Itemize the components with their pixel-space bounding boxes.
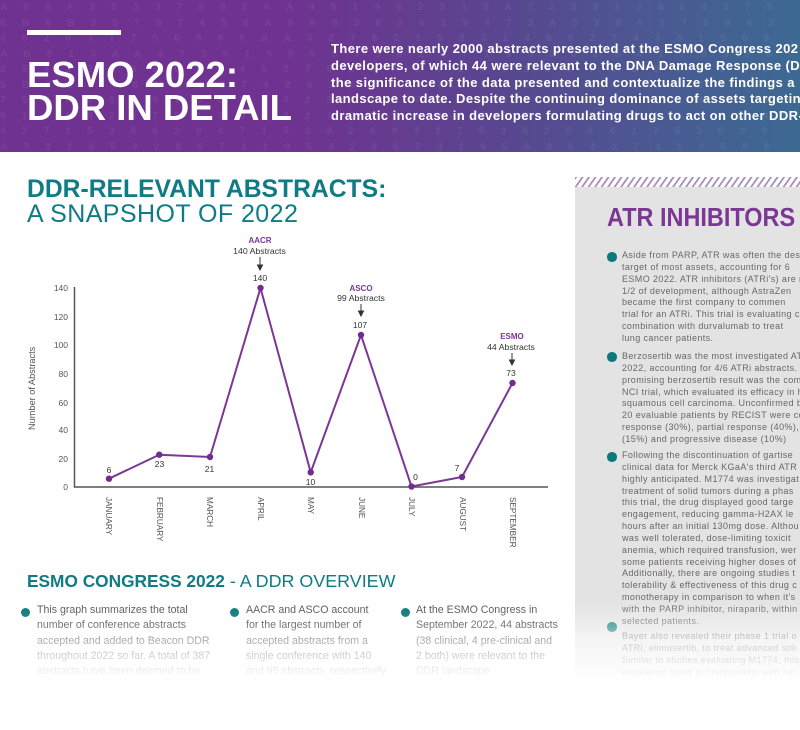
- y axis tick labels: 120: [54, 312, 68, 322]
- text: [37, 604, 210, 677]
- month labels: JANUARY: [104, 497, 113, 536]
- data value labels: [107, 273, 516, 487]
- paragraph 4: Bayer also revealed their phase 1 trial o: [622, 631, 797, 641]
- header banner: 2 5 4 1 2 5 8 3 6 9 8 4 5 2 7 6 1 3 A 5 9 2 8 4 1 6 3 7 5 2 9 8 4 6 1 3: [0, 63, 775, 75]
- paragraph 1: became the first company to commen: [622, 297, 786, 307]
- month labels: FEBRUARY: [155, 497, 164, 542]
- paragraph 1: combination with durvalumab to treat: [622, 321, 783, 331]
- data value labels: 7: [455, 463, 460, 473]
- section heading: DDR-relevant abstracts: A SNAPSHOT OF 2022: [27, 200, 298, 228]
- paragraph 3: selected patients.: [622, 616, 699, 626]
- header banner: 4 6 2 8 3 1 7 5 6 9 8 5 A A 3 2 7 8 2 1 5 8 3 1 4 6 9 2 7 4 3 8 1 5 6 9: [0, 32, 776, 44]
- data points: [106, 285, 516, 490]
- paragraph 3: anemia, which required transfusion, wer: [622, 545, 797, 555]
- overview column 2: [230, 604, 386, 677]
- text: number of conference abstracts: [37, 619, 186, 631]
- paragraph 3: some patients receiving higher doses of: [622, 557, 796, 567]
- bullet 2: [607, 352, 616, 362]
- callout: AACR: AACR: [248, 236, 272, 245]
- paragraph 3: highly anticipated. M1774 was investigat: [622, 474, 799, 484]
- text: This graph summarizes the total: [37, 604, 188, 616]
- header intro text: the significance of the data presented and contextualize the findings a: [331, 75, 795, 90]
- overview column 1: [21, 604, 210, 677]
- section heading: DDR-relevant abstracts: DDR-RELEVANT ABSTRACTS:: [27, 176, 386, 203]
- fade: ATR panel: [575, 600, 800, 680]
- title: [27, 54, 292, 128]
- panel heading: ATR INHIBITORS: [607, 204, 795, 232]
- section heading: ESMO Congress overview: ESMO CONGRESS 2022 - A DDR OVERVIEW: [27, 571, 396, 591]
- paragraph 4: Similar to studies evaluating M1774, this: [622, 655, 799, 665]
- header banner: 7 5 2 8 4 6 3 9 1 5 8 2 6 4 2 8 4 A 2 7 1 3 6 5 9 4 8 2 7 3 5 1 9 6 4 8: [0, 94, 775, 106]
- callout: ASCO: 99 Abstracts: [337, 293, 386, 303]
- paragraph 4: ATRi, elimusertib, to treat advanced soli: [622, 643, 797, 653]
- y axis title: Number of Abstracts: [27, 346, 37, 430]
- text: for the largest number of: [246, 619, 361, 631]
- bullet: [20, 608, 30, 616]
- paragraph 1: trial for an ATRi. This trial is evaluating c: [622, 309, 800, 319]
- overview column 3: [401, 604, 558, 677]
- callout: AACR: 140 Abstracts: [233, 246, 286, 256]
- text: throughout 2022 so far. A total of 387: [37, 650, 210, 662]
- y axis tick labels: 0: [63, 482, 68, 492]
- section heading: DDR-relevant abstracts: [27, 176, 386, 228]
- header banner: 5 B 7 2 9 4 6 1 8 3 5 7 4 2 9 1 6 8 3 4 7 1 5 9 2 6 8 3 4 1 7 5 2 9 6 4: [0, 78, 776, 90]
- month labels: SEPTEMBER: [508, 497, 517, 548]
- text: accepted abstracts from a: [246, 635, 368, 647]
- header banner: A B 9 1 3 A A 4 7 3 5 1 5 8 9 8 3 3 6 2 4 7 1 9 5 3 8 2 6 4 1 7 9 3 5 8: [0, 48, 779, 60]
- fade: overview columns: [0, 606, 575, 682]
- axes: [74, 287, 548, 487]
- paragraph 3: engagement, reducing gamma-H2AX le: [622, 509, 794, 519]
- paragraph 3: Additionally, there are ongoing studies t: [622, 568, 795, 578]
- month labels: [104, 497, 517, 548]
- panel: ATR inhibitors: [575, 177, 800, 730]
- paragraph 4: [622, 631, 799, 677]
- paragraph 2: 20 evaluable patients by RECIST were co: [622, 410, 800, 420]
- paragraph 1: lung cancer patients.: [622, 333, 713, 343]
- striped top edge: [575, 177, 800, 187]
- header intro text: developers, of which 44 were relevant to the DNA Damage Response (D: [331, 58, 800, 73]
- text: [246, 604, 386, 677]
- text: accepted and added to Beacon DDR: [37, 635, 210, 647]
- data value labels: 23: [155, 459, 164, 469]
- paragraph 1: Aside from PARP, ATR was often the des: [622, 250, 800, 260]
- paragraph 3: [622, 450, 799, 626]
- y axis tick labels: 40: [59, 425, 68, 435]
- callout: ESMO: 44 Abstracts: [487, 342, 536, 352]
- data value labels: 10: [306, 477, 315, 487]
- text: and 99 abstracts, respectively: [246, 665, 386, 677]
- header banner: [0, 0, 800, 152]
- header intro text: [331, 41, 800, 123]
- bullet 3: [607, 452, 616, 462]
- data line: [109, 288, 512, 486]
- paragraph 1: [622, 250, 800, 343]
- paragraph 1: 1/2 of development, although AstraZen: [622, 286, 791, 296]
- white accent bar: [27, 30, 121, 34]
- callout: AACR: [233, 236, 286, 270]
- data value labels: 73: [506, 368, 516, 378]
- header banner: A 9 8 A 2 5 3 3 7 9 8 2 A A 4 8 1 4 6 2 3 1 8 A 7 2 5 9 1 3 8 6 4 2 7 5: [0, 1, 779, 13]
- callout: ESMO: [487, 332, 536, 365]
- paragraph 3: was well tolerated, dose-limiting toxicit: [622, 533, 791, 543]
- month labels: AUGUST: [458, 497, 467, 531]
- month labels: APRIL: [256, 497, 265, 521]
- header banner: 8 B 9 B 2 5 7 9 7 4 5 8 A 9 A 8 3 8 2 6 1 9 4 7 3 A 5 2 8 6 1 7 3 9 4 2: [0, 16, 780, 28]
- text: At the ESMO Congress in: [416, 604, 537, 616]
- text: September 2022, 44 abstracts: [416, 619, 558, 631]
- y axis tick labels: [54, 283, 68, 492]
- data value labels: 107: [353, 320, 367, 330]
- text: abstracts have been deemed to be: [37, 665, 200, 677]
- callout: ESMO: ESMO: [500, 332, 524, 341]
- text: DDR landscape: [416, 665, 490, 677]
- callout: ASCO: [337, 284, 386, 316]
- text: [416, 604, 558, 677]
- paragraph 2: [622, 351, 800, 444]
- y axis tick labels: 80: [59, 369, 68, 379]
- text: AACR and ASCO account: [246, 604, 368, 616]
- title: DDR IN DETAIL: [27, 86, 292, 128]
- bullet: [230, 608, 238, 616]
- paragraph 1: target of most assets, accounting for 6: [622, 262, 790, 272]
- data value labels: 140: [253, 273, 267, 283]
- data value labels: 6: [107, 465, 112, 475]
- text: (38 clinical, 4 pre-clinical and: [416, 635, 552, 647]
- data value labels: 21: [205, 464, 214, 474]
- title: ESMO 2022:: [27, 54, 238, 95]
- paragraph 4: escalation study in combination with nir: [622, 667, 794, 677]
- bullet 4: [607, 622, 616, 632]
- paragraph 3: monotherapy in comparison to when it's: [622, 592, 796, 602]
- month labels: MARCH: [205, 497, 214, 527]
- month labels: MAY: [306, 497, 315, 515]
- header intro text: landscape to date. Despite the continuing dominance of assets targetin: [331, 91, 800, 106]
- header intro text: dramatic increase in developers formulating drugs to act on other DDR-: [331, 108, 800, 123]
- paragraph 3: treatment of solid tumors during a phas: [622, 486, 794, 496]
- header intro text: There were nearly 2000 abstracts presented at the ESMO Congress 202: [331, 41, 798, 56]
- month labels: JULY: [407, 497, 416, 517]
- bullet: [400, 608, 410, 616]
- paragraph 3: with the PARP inhibitor, niraparib, within: [622, 604, 798, 614]
- paragraph 2: (15%) and progressive disease (10%): [622, 434, 787, 444]
- paragraph 2: squamous cell carcinoma. Unconfirmed b: [622, 398, 800, 408]
- paragraph 3: tolerability & effectiveness of this drug c: [622, 580, 797, 590]
- month labels: JUNE: [357, 497, 366, 519]
- y axis tick labels: 140: [54, 283, 68, 293]
- header banner: 9 1 3 6 8 2 4 7 5 1 3 9 6 8 2 1 4 7 5 A 3 9 2 6 8 1 4 7 5 3 9 2 6 8 1 4: [0, 110, 775, 122]
- data value labels: 0: [413, 472, 418, 482]
- text: single conference with 140: [246, 650, 371, 662]
- paragraph 3: hours after an initial 130mg dose. Althou: [622, 521, 799, 531]
- y axis tick labels: 60: [59, 398, 68, 408]
- y axis tick labels: 100: [54, 340, 68, 350]
- paragraph 3: this trial, the drug displayed good targe: [622, 497, 794, 507]
- paragraph 3: Following the discontinuation of gartise: [622, 450, 793, 460]
- paragraph 2: Berzosertib was the most investigated AT: [622, 351, 800, 361]
- text: 2 both) were relevant to the: [416, 650, 545, 662]
- bullet 1: [607, 252, 616, 262]
- paragraph 3: clinical data for Merck KGaA's third ATR: [622, 462, 797, 472]
- line chart: abstracts per month: [27, 236, 548, 548]
- callout: ASCO: ASCO: [349, 284, 373, 293]
- header banner: 4 2 7 1 5 3 8 6 2 9 4 7 1 5 3 8 2 6 9 4 1 7 5 3 8 2 9 6 4 1 7 5 3 8 2 9: [0, 125, 774, 137]
- y axis tick labels: 20: [59, 454, 68, 464]
